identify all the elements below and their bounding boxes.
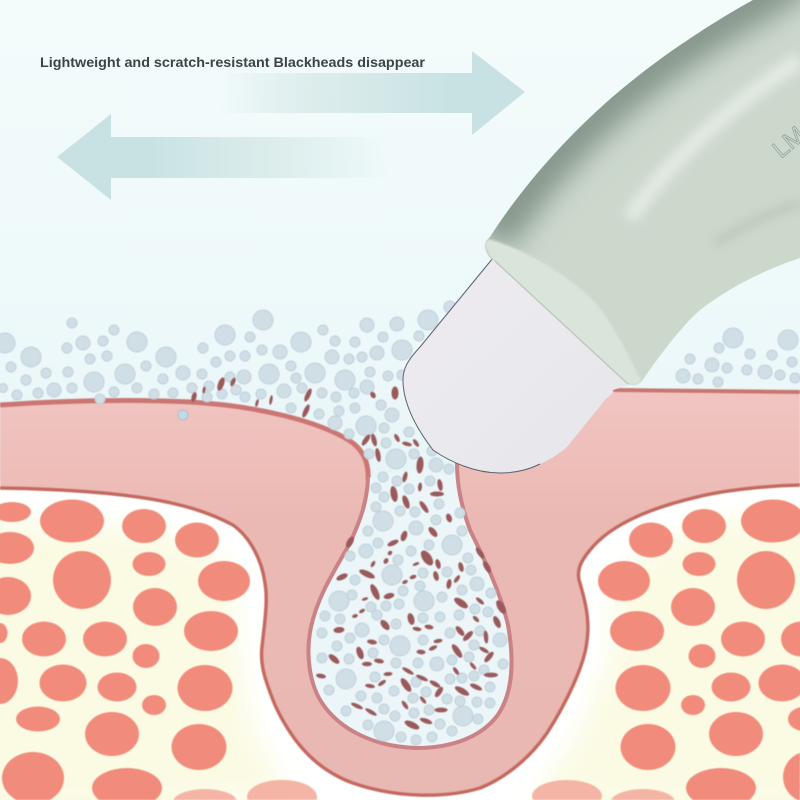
skin layer xyxy=(0,390,800,795)
scraper blade xyxy=(403,258,632,473)
left arrow xyxy=(57,114,400,200)
background xyxy=(0,0,800,480)
handle top edge shading xyxy=(490,0,800,237)
pore xyxy=(308,463,512,748)
heading text: Lightweight and scratch-resistant Blackheads disappear xyxy=(40,55,426,70)
fat cells left xyxy=(0,500,317,800)
device handle xyxy=(485,0,800,385)
fat cells right xyxy=(532,500,800,800)
blade outline xyxy=(403,258,540,473)
handle lip xyxy=(485,240,641,385)
right arrow xyxy=(210,51,525,135)
handle highlight band xyxy=(630,60,800,218)
bubbles xyxy=(0,301,800,745)
blade seat line xyxy=(495,261,628,384)
handle lower shadow band xyxy=(715,204,800,244)
blackhead particles xyxy=(190,376,508,731)
lower tissue background xyxy=(0,480,800,800)
